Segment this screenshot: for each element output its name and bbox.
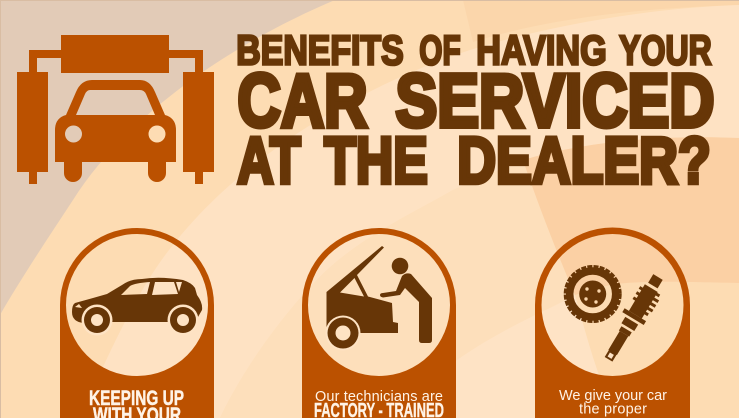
icon: shock absorber: [598, 271, 669, 366]
panel text: We give your car: [559, 388, 667, 404]
panel: proper maintenance: [535, 227, 690, 418]
title: OF: [419, 28, 461, 74]
title: [236, 28, 715, 197]
panel text: [559, 388, 667, 418]
icon: tyre: [565, 266, 620, 322]
panel text: the proper: [579, 402, 647, 418]
title: CAR: [238, 60, 368, 144]
title: THE: [324, 123, 428, 197]
panel: keeping up: [60, 228, 214, 418]
icon: car wash: [17, 35, 214, 184]
panel: factory trained: [302, 228, 456, 418]
title: HAVING: [476, 28, 607, 74]
panel text: KEEPING UP: [89, 387, 184, 410]
title: BENEFITS: [236, 28, 404, 74]
panel text: Our technicians are: [315, 389, 443, 405]
title: YOUR: [619, 28, 712, 74]
icon: mechanic at car: [326, 246, 432, 350]
panel text: [314, 389, 444, 418]
icon: hatchback car: [72, 278, 202, 336]
panel text: [89, 387, 184, 418]
title: AT: [237, 123, 301, 197]
